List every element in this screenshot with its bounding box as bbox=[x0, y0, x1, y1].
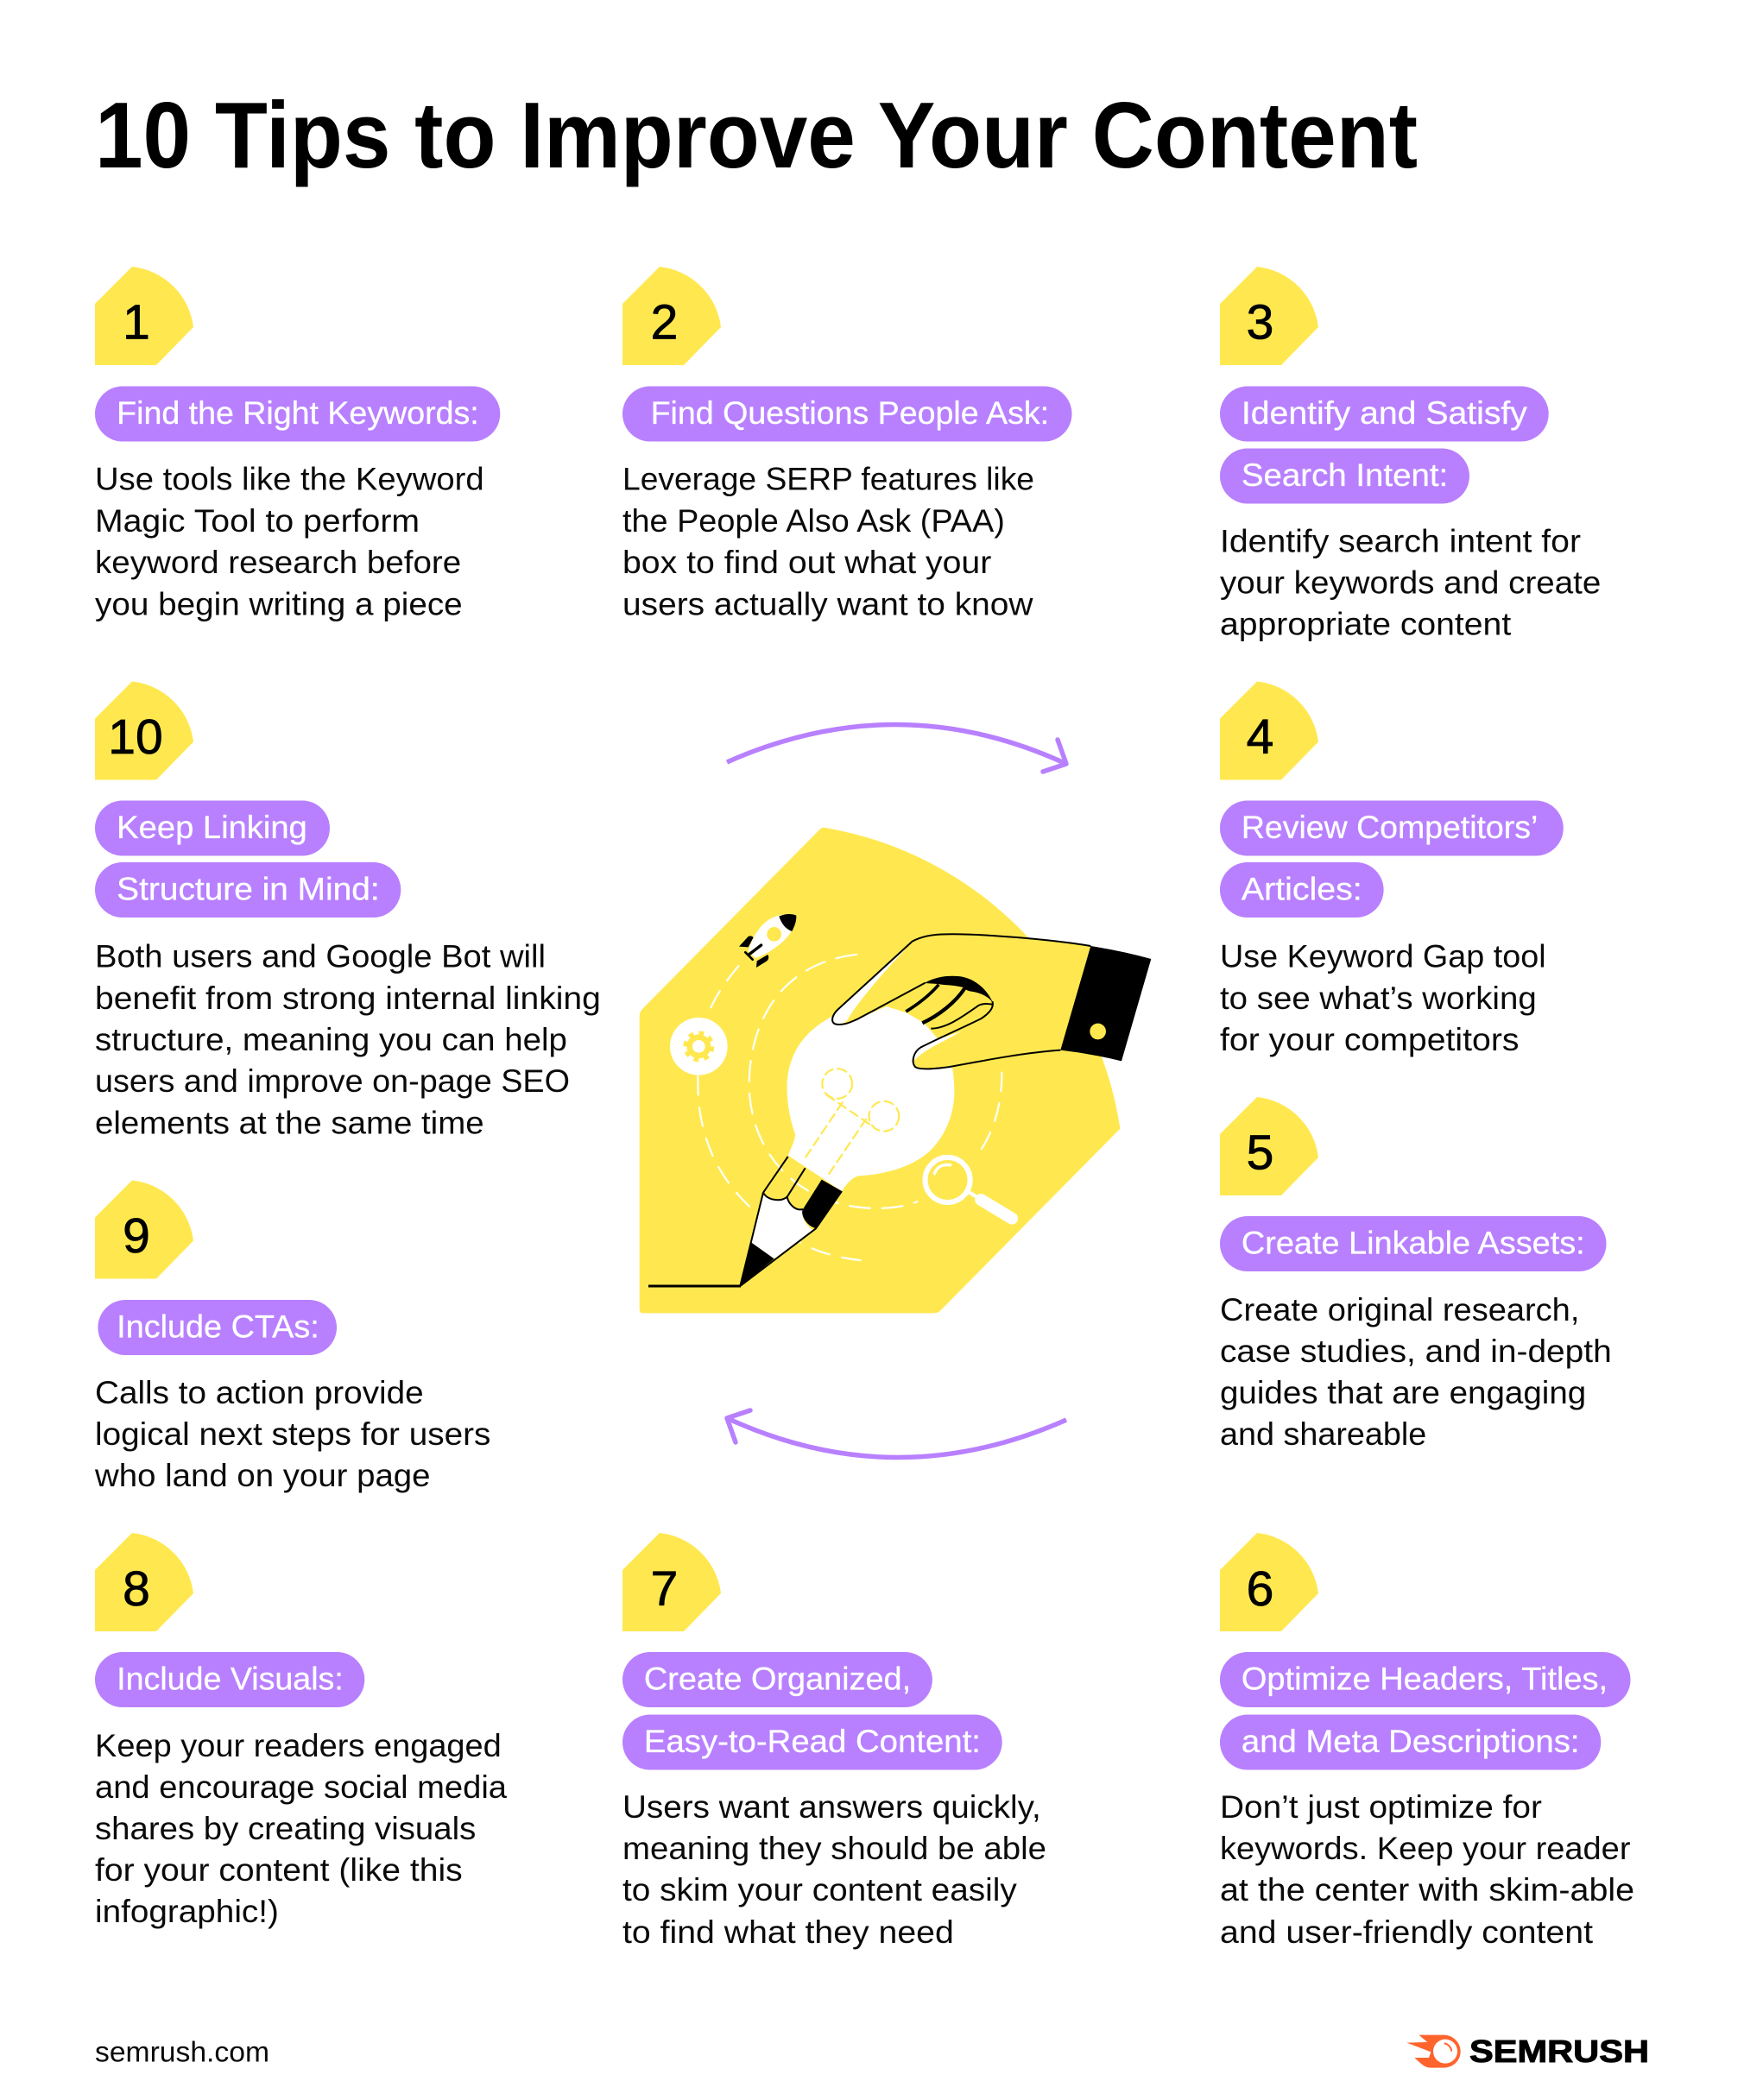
heading pill bbox=[622, 387, 1072, 442]
body text: infographic!) bbox=[95, 1894, 279, 1929]
body text bbox=[95, 939, 601, 1141]
bulb filament bbox=[804, 1069, 899, 1177]
body text bbox=[95, 1728, 507, 1929]
heading pills: Search Intent: bbox=[1242, 457, 1448, 493]
number badge 3: 3 bbox=[1247, 295, 1273, 350]
icon: gear bbox=[670, 1018, 728, 1075]
number badge 5: 5 bbox=[1247, 1126, 1273, 1181]
body text: Use tools like the Keyword bbox=[95, 461, 484, 497]
number badge 1 bbox=[95, 267, 193, 365]
heading pills: Keep Linking bbox=[117, 810, 307, 845]
number badge 7 bbox=[622, 1533, 721, 1631]
body text bbox=[1220, 1789, 1634, 1950]
body text: your keywords and create bbox=[1220, 564, 1601, 601]
body text: Create original research, bbox=[1220, 1292, 1579, 1327]
body text: at the center with skim-able bbox=[1220, 1872, 1634, 1908]
panel: tip 8 bbox=[95, 1533, 507, 1929]
number badge 8 bbox=[95, 1533, 193, 1631]
body text bbox=[1220, 523, 1601, 642]
shirt cuff bbox=[1060, 946, 1151, 1061]
body text: and encourage social media bbox=[95, 1769, 507, 1805]
panel: tip 2 bbox=[622, 267, 1072, 621]
body text: for your competitors bbox=[1220, 1022, 1520, 1057]
icon: rocket bbox=[739, 914, 796, 968]
body text: guides that are engaging bbox=[1220, 1375, 1586, 1410]
icon: magnifying glass bbox=[926, 1157, 1012, 1219]
body text: Users want answers quickly, bbox=[622, 1789, 1041, 1825]
dashed orbits bbox=[698, 955, 1002, 1260]
heading pill: Include CTAs: bbox=[117, 1309, 319, 1345]
arrow: bottom curved bbox=[727, 1410, 1066, 1458]
body text bbox=[622, 461, 1034, 621]
panel: tip 9 bbox=[94, 1181, 490, 1493]
heading pill: Find the Right Keywords: bbox=[117, 395, 479, 431]
body text: shares by creating visuals bbox=[95, 1811, 476, 1846]
heading pills: Articles: bbox=[1242, 872, 1362, 906]
heading pills: and Meta Descriptions: bbox=[1242, 1724, 1580, 1759]
body text: who land on your page bbox=[94, 1458, 430, 1493]
body text bbox=[1220, 939, 1546, 1057]
pencil bbox=[740, 1157, 842, 1286]
body text: box to find out what your bbox=[622, 545, 991, 580]
body text: appropriate content bbox=[1220, 606, 1512, 642]
heading pill bbox=[1220, 1216, 1606, 1271]
number badge 2 bbox=[622, 267, 721, 365]
light bulb bbox=[787, 1006, 954, 1191]
heading pills bbox=[95, 801, 401, 918]
body text: logical next steps for users bbox=[95, 1416, 490, 1452]
number badge 10: 10 bbox=[108, 709, 163, 765]
number badge 9 bbox=[95, 1181, 193, 1279]
panel: tip 1 bbox=[95, 267, 500, 621]
heading pills bbox=[1220, 387, 1549, 504]
body text: for your content (like this bbox=[95, 1852, 463, 1888]
body text: to find what they need bbox=[622, 1914, 954, 1950]
heading pills: Identify and Satisfy bbox=[1242, 395, 1527, 431]
body text bbox=[95, 461, 484, 621]
number badge 6: 6 bbox=[1247, 1561, 1273, 1617]
number badge 2: 2 bbox=[651, 295, 678, 350]
heading pills: Optimize Headers, Titles, bbox=[1242, 1661, 1608, 1697]
heading pills bbox=[1220, 801, 1564, 918]
body text: Leverage SERP features like bbox=[622, 461, 1034, 497]
central illustration bbox=[640, 828, 1151, 1313]
heading pill: Find Questions People Ask: bbox=[651, 395, 1049, 431]
heading pill bbox=[95, 387, 500, 442]
heading pill: Include Visuals: bbox=[117, 1661, 344, 1697]
body text: and user-friendly content bbox=[1220, 1914, 1594, 1950]
number badge 4: 4 bbox=[1247, 709, 1273, 765]
number badge 8: 8 bbox=[123, 1561, 150, 1617]
body text bbox=[622, 1789, 1046, 1950]
body text: users and improve on-page SEO bbox=[95, 1063, 570, 1099]
heading pills bbox=[622, 1652, 1002, 1769]
panel: tip 10 bbox=[95, 682, 601, 1141]
number badge 5 bbox=[1220, 1097, 1318, 1195]
body text: Magic Tool to perform bbox=[95, 503, 420, 539]
body text: and shareable bbox=[1220, 1416, 1426, 1452]
body text: to skim your content easily bbox=[622, 1872, 1017, 1908]
body text bbox=[1220, 1292, 1612, 1452]
number badge 7: 7 bbox=[651, 1561, 678, 1617]
hand bbox=[832, 934, 1090, 1069]
heading pill: Create Linkable Assets: bbox=[1242, 1226, 1585, 1260]
heading pills bbox=[1220, 1652, 1630, 1769]
panel: tip 4 bbox=[1220, 682, 1564, 1057]
logo flame icon bbox=[1406, 2035, 1461, 2068]
body text: Identify search intent for bbox=[1220, 523, 1581, 559]
heading pills: Create Organized, bbox=[644, 1661, 911, 1697]
body text: keywords. Keep your reader bbox=[1220, 1831, 1630, 1866]
body text: elements at the same time bbox=[95, 1105, 484, 1141]
arrow: top curved bbox=[727, 724, 1066, 772]
body text: Don’t just optimize for bbox=[1220, 1789, 1542, 1825]
footer url: semrush.com bbox=[95, 2035, 269, 2068]
title: 10 Tips to Improve Your Content bbox=[95, 83, 1418, 188]
number badge 3 bbox=[1220, 267, 1318, 365]
body text: you begin writing a piece bbox=[95, 587, 463, 621]
body text: Calls to action provide bbox=[95, 1375, 424, 1410]
body text: meaning they should be able bbox=[622, 1831, 1046, 1866]
panel: tip 7 bbox=[622, 1533, 1046, 1950]
body text: case studies, and in-depth bbox=[1220, 1334, 1612, 1369]
body text: the People Also Ask (PAA) bbox=[622, 503, 1005, 539]
number badge 1: 1 bbox=[123, 295, 150, 350]
logo: semrush bbox=[1406, 2034, 1649, 2069]
heading pills: Structure in Mind: bbox=[117, 872, 380, 906]
panel: tip 3 bbox=[1220, 267, 1601, 642]
drawn line bbox=[648, 1284, 741, 1288]
body text: to see what’s working bbox=[1220, 981, 1537, 1016]
heading pills: Review Competitors’ bbox=[1242, 810, 1538, 845]
body text: benefit from strong internal linking bbox=[95, 981, 601, 1016]
body text bbox=[94, 1375, 490, 1493]
body text: Use Keyword Gap tool bbox=[1220, 939, 1546, 974]
body text: keyword research before bbox=[95, 545, 461, 580]
body text: Keep your readers engaged bbox=[95, 1728, 502, 1763]
panel: tip 5 bbox=[1220, 1097, 1612, 1452]
number badge 4 bbox=[1220, 682, 1318, 780]
heading pill bbox=[98, 1300, 337, 1355]
panel: tip 6 bbox=[1220, 1533, 1634, 1950]
heading pill bbox=[95, 1652, 364, 1707]
number badge 9: 9 bbox=[123, 1208, 150, 1264]
number badge 10 bbox=[95, 682, 193, 780]
body text: structure, meaning you can help bbox=[95, 1022, 567, 1057]
body text: Both users and Google Bot will bbox=[95, 939, 546, 974]
logo wordmark: SEMRUSH bbox=[1469, 2034, 1649, 2069]
yellow hexagon background bbox=[640, 828, 1120, 1313]
heading pills: Easy-to-Read Content: bbox=[644, 1724, 981, 1759]
body text: users actually want to know bbox=[622, 587, 1033, 621]
number badge 6 bbox=[1220, 1533, 1318, 1631]
